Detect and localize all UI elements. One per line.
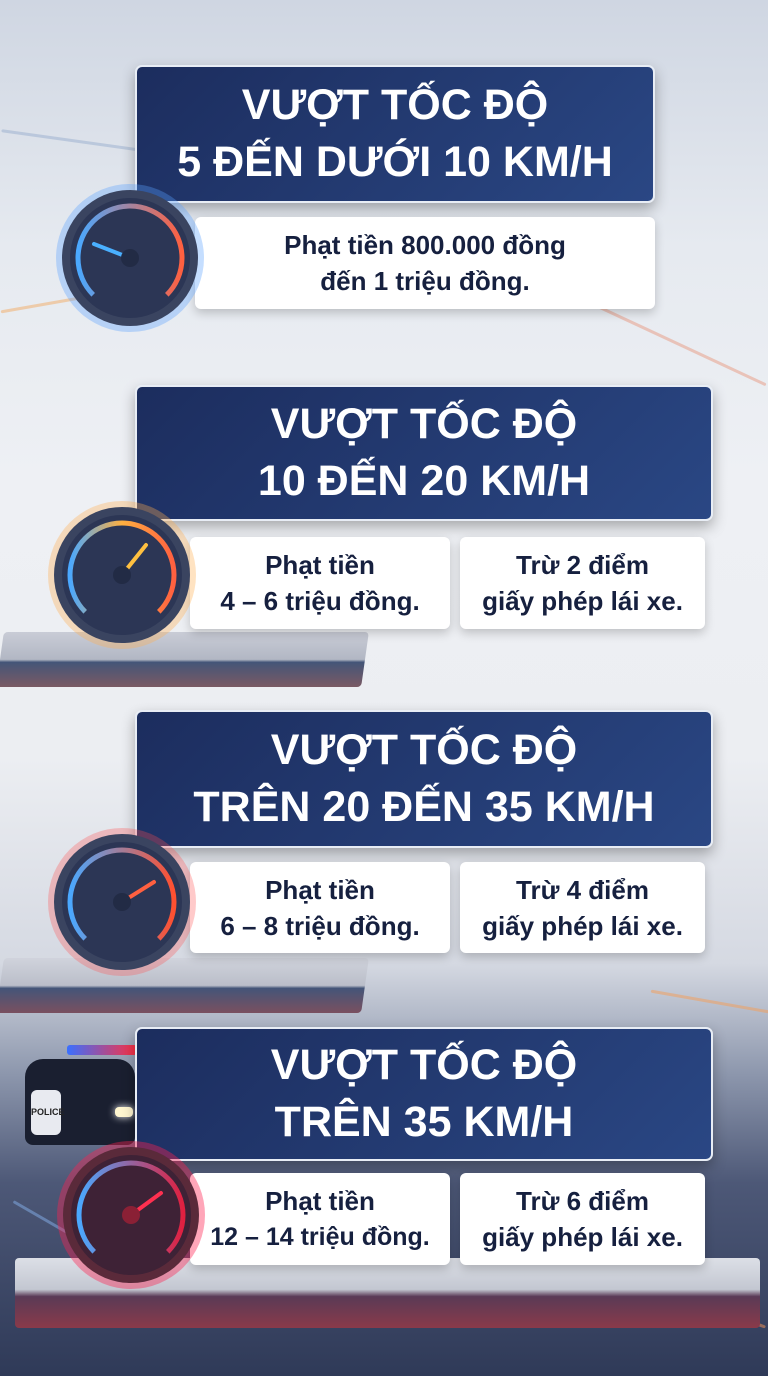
- section 3 fine box: Phạt tiền: [265, 874, 375, 904]
- section 4 fine box: Phạt tiền: [265, 1186, 375, 1216]
- section 4 header: VƯỢT TỐC ĐỘ: [271, 1041, 577, 1089]
- icon: gauge 2: [48, 501, 196, 649]
- section 2 points box: Trừ 2 điểm: [516, 550, 649, 580]
- section 4 fine box: 12 – 14 triệu đồng.: [210, 1223, 430, 1251]
- section 3 fine box: 6 – 8 triệu đồng.: [220, 910, 420, 940]
- section 4 fine box: [190, 1173, 450, 1265]
- icon: gauge 1: [56, 184, 204, 332]
- section 3 header: VƯỢT TỐC ĐỘ: [271, 726, 577, 774]
- section 2 points box: [460, 537, 705, 629]
- section 4 points box: [460, 1173, 705, 1265]
- section 4 header: TRÊN 35 KM/H: [275, 1098, 573, 1146]
- section 3 points box: Trừ 4 điểm: [516, 874, 649, 904]
- section 1 header: VƯỢT TỐC ĐỘ: [242, 81, 548, 129]
- platform 2: [0, 632, 369, 687]
- section 2 header: VƯỢT TỐC ĐỘ: [271, 400, 577, 448]
- section 2 header: 10 ĐẾN 20 KM/H: [258, 457, 590, 505]
- section 4 points box: Trừ 6 điểm: [516, 1186, 649, 1216]
- section 3 header: TRÊN 20 ĐẾN 35 KM/H: [193, 783, 655, 831]
- icon: gauge 4: [57, 1141, 205, 1289]
- icon: police car: [25, 1045, 135, 1145]
- section 3 header: [135, 710, 713, 848]
- section 4 header: [135, 1027, 713, 1161]
- section 1 header: 5 ĐẾN DƯỚI 10 KM/H: [177, 138, 613, 186]
- section 1 fine box: [195, 217, 655, 309]
- platform 3: [0, 958, 369, 1013]
- section 3 fine box: [190, 862, 450, 953]
- section 1 header: [135, 65, 655, 203]
- section 3 points box: giấy phép lái xe.: [482, 910, 683, 940]
- section 2 fine box: 4 – 6 triệu đồng.: [220, 586, 420, 616]
- section 2 points box: giấy phép lái xe.: [482, 586, 683, 616]
- section 2 fine box: [190, 537, 450, 629]
- icon: gauge 3: [48, 828, 196, 976]
- section 2 header: [135, 385, 713, 521]
- section 4 points box: giấy phép lái xe.: [482, 1222, 683, 1252]
- section 1 fine box: Phạt tiền 800.000 đồng: [284, 230, 566, 260]
- section 1 fine box: đến 1 triệu đồng.: [320, 266, 530, 296]
- platform 4: [15, 1258, 760, 1328]
- icon: police car: POLICE: [31, 1107, 65, 1117]
- section 3 points box: [460, 862, 705, 953]
- section 2 fine box: Phạt tiền: [265, 550, 375, 580]
